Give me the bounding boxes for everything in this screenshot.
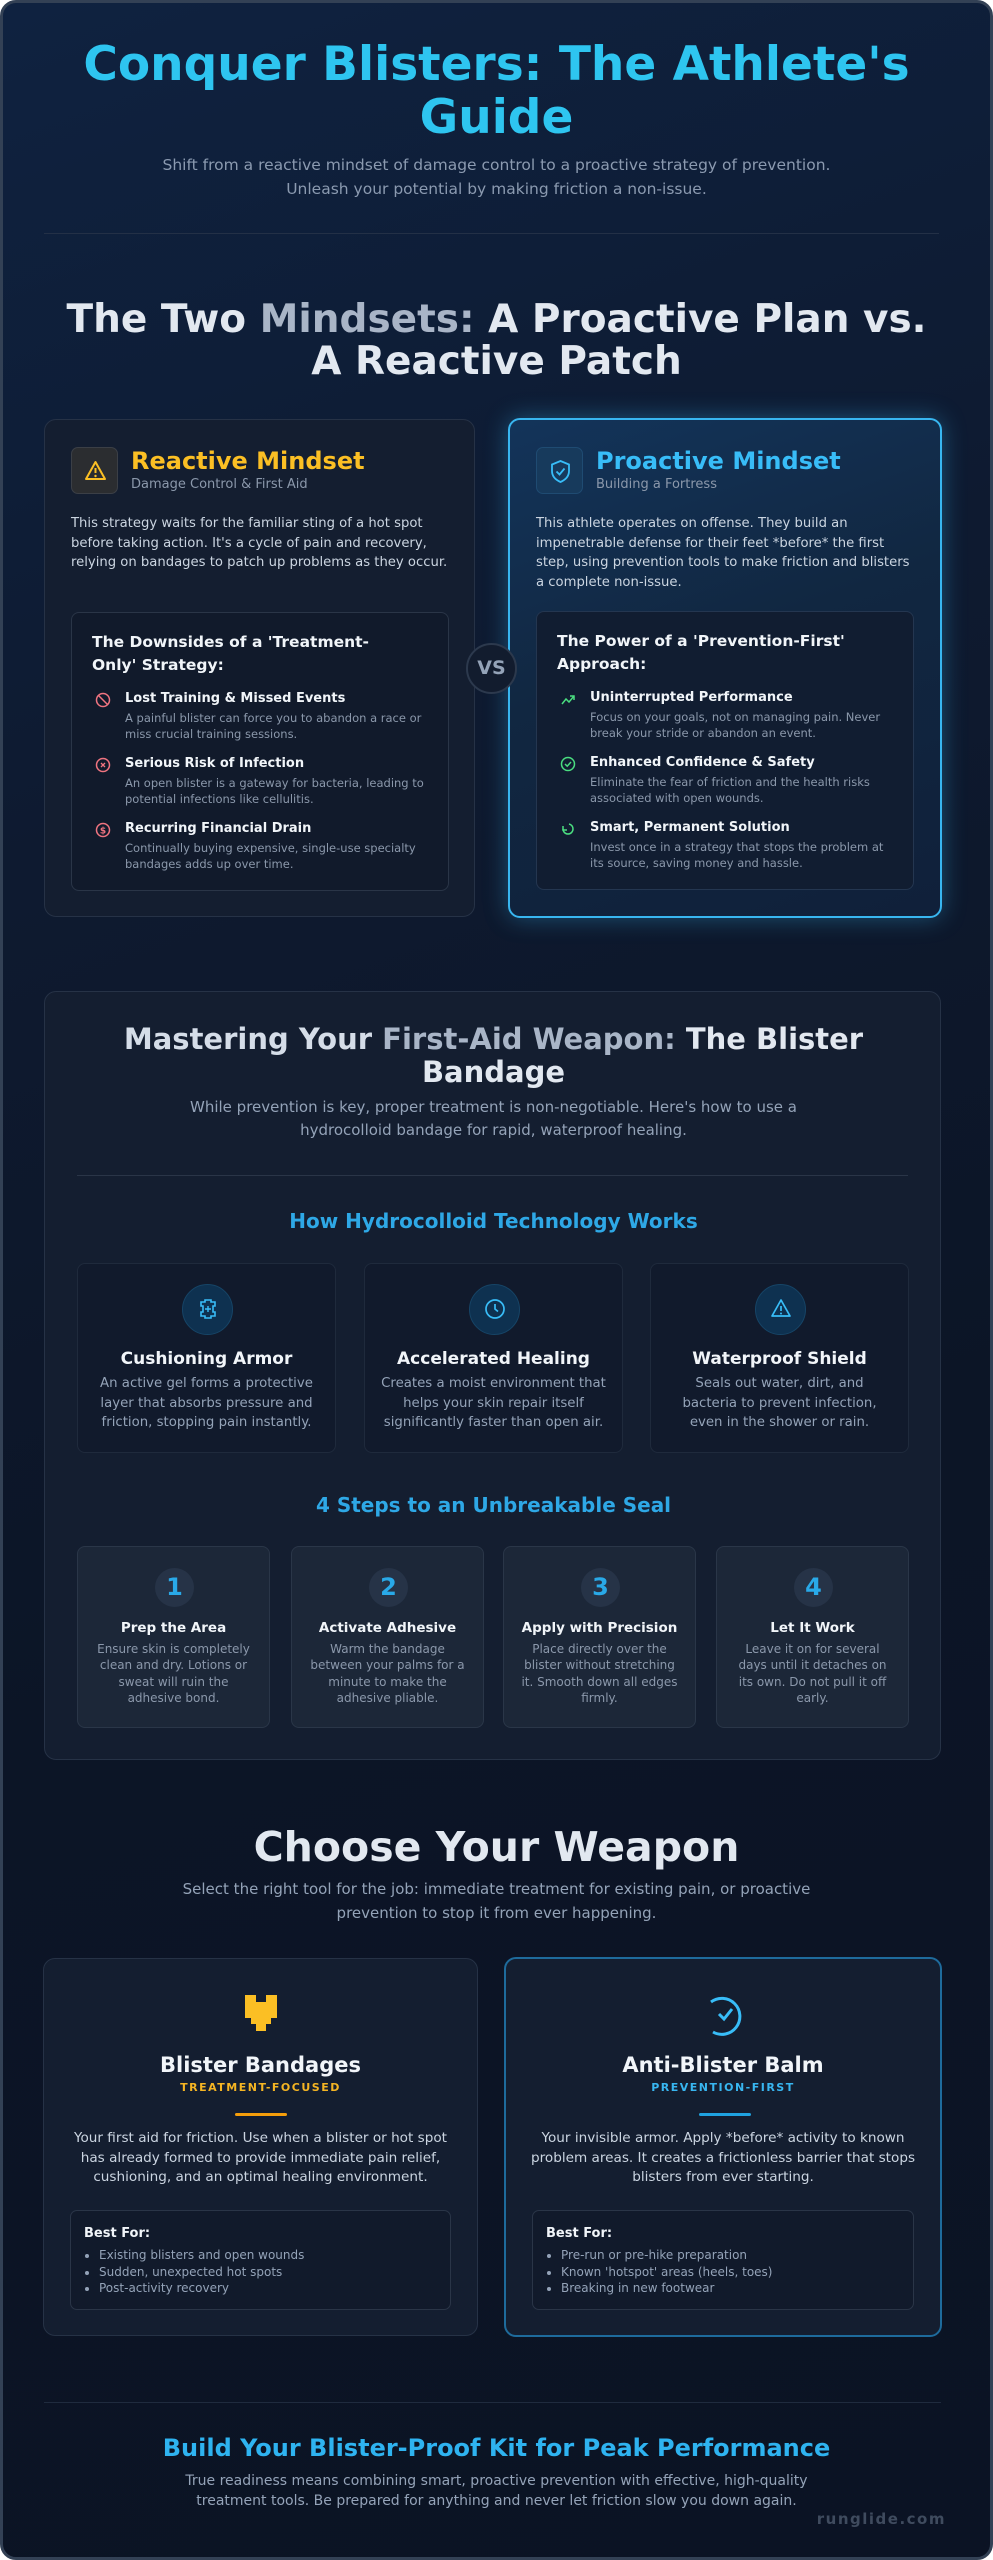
heading: build your kit: Build Your Blister-Proof Kit for Peak Performance — [163, 2434, 830, 2462]
list: best for bandages — [70, 2210, 451, 2310]
card: healing — [364, 1263, 623, 1453]
item: performance — [562, 690, 880, 740]
subtitle — [163, 156, 830, 198]
icon: shield — [536, 447, 583, 494]
list: best for bandages: Existing blisters and open wounds — [99, 2248, 304, 2262]
heading: proactive: Proactive Mindset — [596, 447, 841, 475]
list: best for balm: Breaking in new footwear — [561, 2281, 714, 2295]
brand: runglide: runglide.com — [817, 2510, 946, 2528]
item: lost training: Lost Training & Missed Events — [125, 691, 345, 706]
heading: how it works: How Hydrocolloid Technology Works — [289, 1209, 698, 1233]
card: healing: Accelerated Healing — [397, 1349, 590, 1369]
icon: balm check — [710, 1996, 742, 2036]
title — [83, 37, 910, 145]
step 4: 4 — [805, 1573, 822, 1601]
item: performance: Focus on your goals, not on managing pain. Never break your stride or abandon an event. — [590, 710, 880, 740]
panel: benefits: The Power of a 'Prevention-First' — [557, 632, 845, 650]
card: waterproof: Waterproof Shield — [692, 1349, 867, 1369]
heading: reactive: Reactive Mindset — [131, 447, 365, 475]
card: cushioning: Cushioning Armor — [121, 1349, 292, 1369]
steps — [77, 1546, 909, 1728]
heading: mastering: Bandage — [422, 1055, 565, 1089]
icon: VS badge — [466, 643, 517, 694]
step 1: 1 — [166, 1573, 183, 1601]
text: closing: True readiness means combining smart, proactive prevention with effective, high-quality — [185, 2473, 808, 2489]
card: waterproof — [650, 1263, 909, 1453]
heading: steps: 4 Steps to an Unbreakable Seal — [316, 1493, 671, 1517]
text: intro: While prevention is key, proper treatment is non-negotiable. Here's how to use a — [190, 1098, 797, 1116]
panel: benefits — [536, 611, 914, 890]
panel: blister bandage — [44, 991, 941, 1760]
step 2: 2 — [380, 1573, 397, 1601]
item: solution — [562, 820, 884, 870]
item: infection — [96, 756, 424, 806]
list: best for bandages: Sudden, unexpected hot spots — [99, 2264, 282, 2278]
card: anti-blister balm — [504, 1957, 942, 2337]
text: reactive description: This strategy waits for the familiar sting of a hot spot before taking action. It's a cycle of pain and recovery, relying on bandages to patch up problems as they occur. — [71, 516, 447, 570]
card: blister bandages — [43, 1958, 478, 2336]
step 1: Ensure skin is completely clean and dry. Lotions or sweat will ruin the adhesive bond. — [97, 1642, 250, 1705]
card: anti-blister balm: Anti-Blister Balm — [622, 2053, 824, 2077]
title: Conquer Blisters: The Athlete's — [83, 37, 910, 92]
list: best for bandages: Post-activity recovery — [99, 2281, 229, 2295]
heading: choose your weapon: Choose Your Weapon — [254, 1823, 739, 1871]
heading: mastering — [124, 1022, 863, 1089]
step 3: 3 — [592, 1573, 609, 1601]
item: lost training: A painful blister can force you to abandon a race or miss crucial training sessions. — [125, 711, 421, 741]
item: confidence: Enhanced Confidence & Safety — [590, 755, 815, 770]
step 4: Let It Work — [770, 1620, 855, 1636]
step 2: Warm the bandage between your palms for a minute to make the adhesive pliable. — [310, 1642, 465, 1705]
panel: downsides: $ — [100, 826, 106, 836]
card: cushioning: An active gel forms a protective layer that absorbs pressure and friction, stopping pain instantly. — [100, 1376, 313, 1430]
card: healing: Creates a moist environment that helps your skin repair itself significantly faster than open air. — [381, 1376, 606, 1430]
item: financial — [96, 821, 416, 871]
icon: bandage — [245, 1995, 277, 2031]
step 4 — [716, 1546, 909, 1728]
list: best for bandages: Best For: — [84, 2226, 150, 2241]
panel: proactive mindset: Building a Fortress — [596, 477, 717, 492]
panel: proactive mindset — [508, 418, 942, 918]
icon: warning — [71, 447, 118, 494]
text: choose intro: prevention to stop it from ever happening. — [337, 1904, 656, 1922]
panel: downsides: Only' Strategy: — [92, 656, 224, 674]
list: best for balm — [532, 2210, 914, 2310]
icon: VS badge: VS — [477, 657, 506, 679]
card: anti-blister balm: Your invisible armor. Apply *before* activity to known problem areas. It creates a frictionless barrier that stops blisters from ever starting. — [531, 2130, 915, 2185]
step 1 — [77, 1546, 270, 1728]
subtitle: Unleash your potential by making friction a non-issue. — [286, 180, 707, 198]
text: proactive description: This athlete operates on offense. They build an impenetrable defense for their feet *before* the first step, using prevention tools to make friction and blisters a complete non-issue. — [536, 516, 910, 590]
panel: benefits: Approach: — [557, 655, 646, 673]
list: best for balm: Known 'hotspot' areas (heels, toes) — [561, 2264, 772, 2278]
title: Guide — [420, 90, 573, 145]
subtitle: Shift from a reactive mindset of damage control to a proactive strategy of prevention. — [163, 156, 830, 174]
step 3: Place directly over the blister without stretching it. Smooth down all edges firmly. — [521, 1642, 678, 1705]
card: anti-blister balm: PREVENTION-FIRST — [651, 2081, 795, 2094]
card: cushioning — [77, 1263, 336, 1453]
item: confidence: Eliminate the fear of friction and the health risks associated with open wounds. — [590, 775, 870, 805]
panel: reactive mindset — [44, 419, 475, 917]
step 3: Apply with Precision — [522, 1620, 677, 1636]
item: lost training — [96, 691, 422, 741]
card: blister bandages: Blister Bandages — [160, 2053, 361, 2077]
panel: downsides: The Downsides of a 'Treatment- — [92, 633, 369, 651]
step 3 — [503, 1546, 696, 1728]
step 4: Leave it on for several days until it detaches on its own. Do not pull it off early. — [738, 1642, 887, 1705]
step 1: Prep the Area — [121, 1620, 226, 1636]
item: infection: An open blister is a gateway for bacteria, leading to potential infections like cellulitis. — [125, 776, 424, 806]
text: closing: treatment tools. Be prepared for anything and never let friction slow you down again. — [196, 2493, 797, 2509]
card: blister bandages: Your first aid for friction. Use when a blister or hot spot has already formed to provide immediate pain relief, cushioning, and an optimal healing environment. — [74, 2130, 447, 2185]
text: choose intro — [183, 1880, 810, 1922]
text: choose intro: Select the right tool for the job: immediate treatment for existing pain, or proactive — [183, 1880, 810, 1898]
heading: two mindsets: The Two Mindsets: A Proactive Plan vs. — [66, 297, 927, 342]
text: intro: hydrocolloid bandage for rapid, waterproof healing. — [300, 1121, 687, 1139]
card: waterproof: Seals out water, dirt, and bacteria to prevent infection, even in the shower or rain. — [682, 1376, 877, 1430]
card: blister bandages: TREATMENT-FOCUSED — [180, 2081, 341, 2094]
item: performance: Uninterrupted Performance — [590, 690, 793, 705]
list: best for balm: Pre-run or pre-hike preparation — [561, 2248, 747, 2262]
item: solution: Smart, Permanent Solution — [590, 820, 790, 835]
item: financial: Continually buying expensive, single-use specialty bandages adds up over time. — [125, 841, 416, 871]
text: closing — [185, 2473, 808, 2509]
heading: mastering: Mastering Your First-Aid Weapon: The Blister — [124, 1022, 863, 1056]
step 2 — [291, 1546, 484, 1728]
heading: two mindsets: A Reactive Patch — [311, 339, 682, 384]
panel: reactive mindset: Damage Control & First Aid — [131, 477, 308, 492]
item: confidence — [560, 755, 870, 805]
item: financial: Recurring Financial Drain — [125, 821, 311, 836]
item: infection: Serious Risk of Infection — [125, 756, 304, 771]
panel: downsides — [71, 612, 449, 891]
heading: two mindsets — [66, 297, 927, 384]
text: intro — [190, 1098, 797, 1139]
step 2: Activate Adhesive — [319, 1620, 456, 1636]
list: best for balm: Best For: — [546, 2226, 612, 2241]
item: solution: Invest once in a strategy that stops the problem at its source, saving money and hassle. — [590, 840, 883, 870]
cards: technology — [77, 1263, 909, 1453]
